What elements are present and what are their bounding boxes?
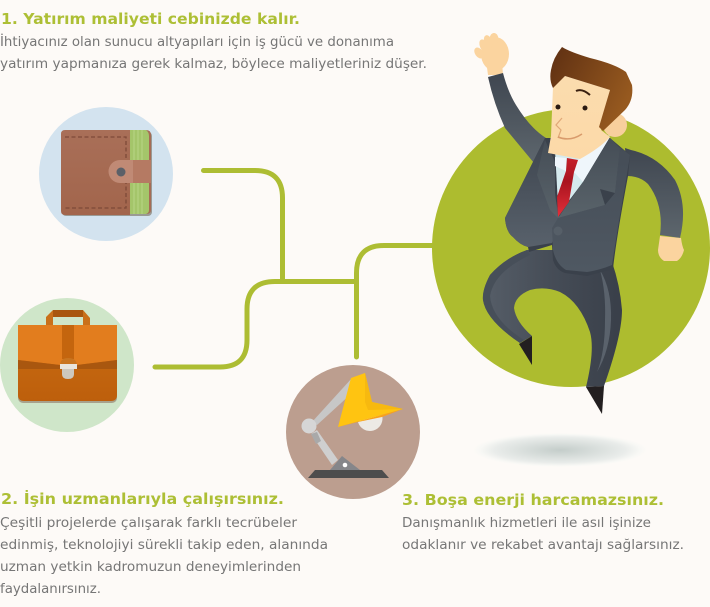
right arm — [625, 148, 683, 238]
hair — [550, 47, 632, 131]
jacket left side — [505, 138, 560, 247]
connector lines — [155, 170, 436, 367]
icon: briefcase — [0, 298, 134, 432]
jacket button — [554, 226, 562, 236]
tie — [557, 158, 578, 217]
illustration: jumping businessman — [472, 33, 684, 414]
right hand — [658, 236, 684, 261]
right lapel — [558, 138, 620, 218]
shoes — [519, 336, 532, 365]
raised arm — [488, 73, 546, 163]
heading: step 2: 2. İşin uzmanlarıyla çalışırsınız. — [1, 489, 284, 508]
heading: step 3: 3. Boşa enerji harcamazsınız. — [402, 491, 664, 509]
jacket silhouette — [505, 138, 630, 276]
collar — [555, 137, 610, 182]
trousers — [483, 250, 622, 387]
panel: green circle — [432, 109, 710, 387]
head — [548, 76, 610, 159]
icon: desk lamp — [286, 365, 420, 499]
text block: step 2: uzman yetkin kadromuzun deneyimlerinden — [0, 560, 301, 575]
facial features — [556, 90, 590, 139]
left lapel — [537, 140, 558, 218]
raised fist — [472, 33, 509, 75]
text block: step 3: odaklanır ve rekabet avantajı sağlarsınız. — [402, 538, 684, 553]
text block: step 1: yatırım yapmanıza gerek kalmaz, böylece maliyetleriniz düşer. — [0, 57, 427, 72]
icon: wallet — [39, 107, 173, 241]
text block: step 2 — [0, 516, 328, 597]
text block: step 1 — [0, 34, 427, 72]
text block: step 1: İhtiyacınız olan sunucu altyapıları için iş gücü ve donanıma — [0, 34, 394, 50]
heading: step 1: 1. Yatırım maliyeti cebinizde kalır. — [1, 10, 300, 28]
jacket lower front — [552, 147, 630, 272]
text block: step 2: Çeşitli projelerde çalışarak farklı tecrübeler — [0, 516, 298, 531]
floor shadow — [473, 433, 647, 467]
text block: step 2: faydalanırsınız. — [0, 582, 101, 597]
text block: step 2: edinmiş, teknolojiyi sürekli takip eden, alanında — [0, 538, 328, 553]
ear — [603, 113, 627, 137]
shirt — [555, 135, 610, 205]
text block: step 3: Danışmanlık hizmetleri ile asıl işinize — [402, 516, 651, 531]
text block: step 3 — [402, 516, 684, 553]
